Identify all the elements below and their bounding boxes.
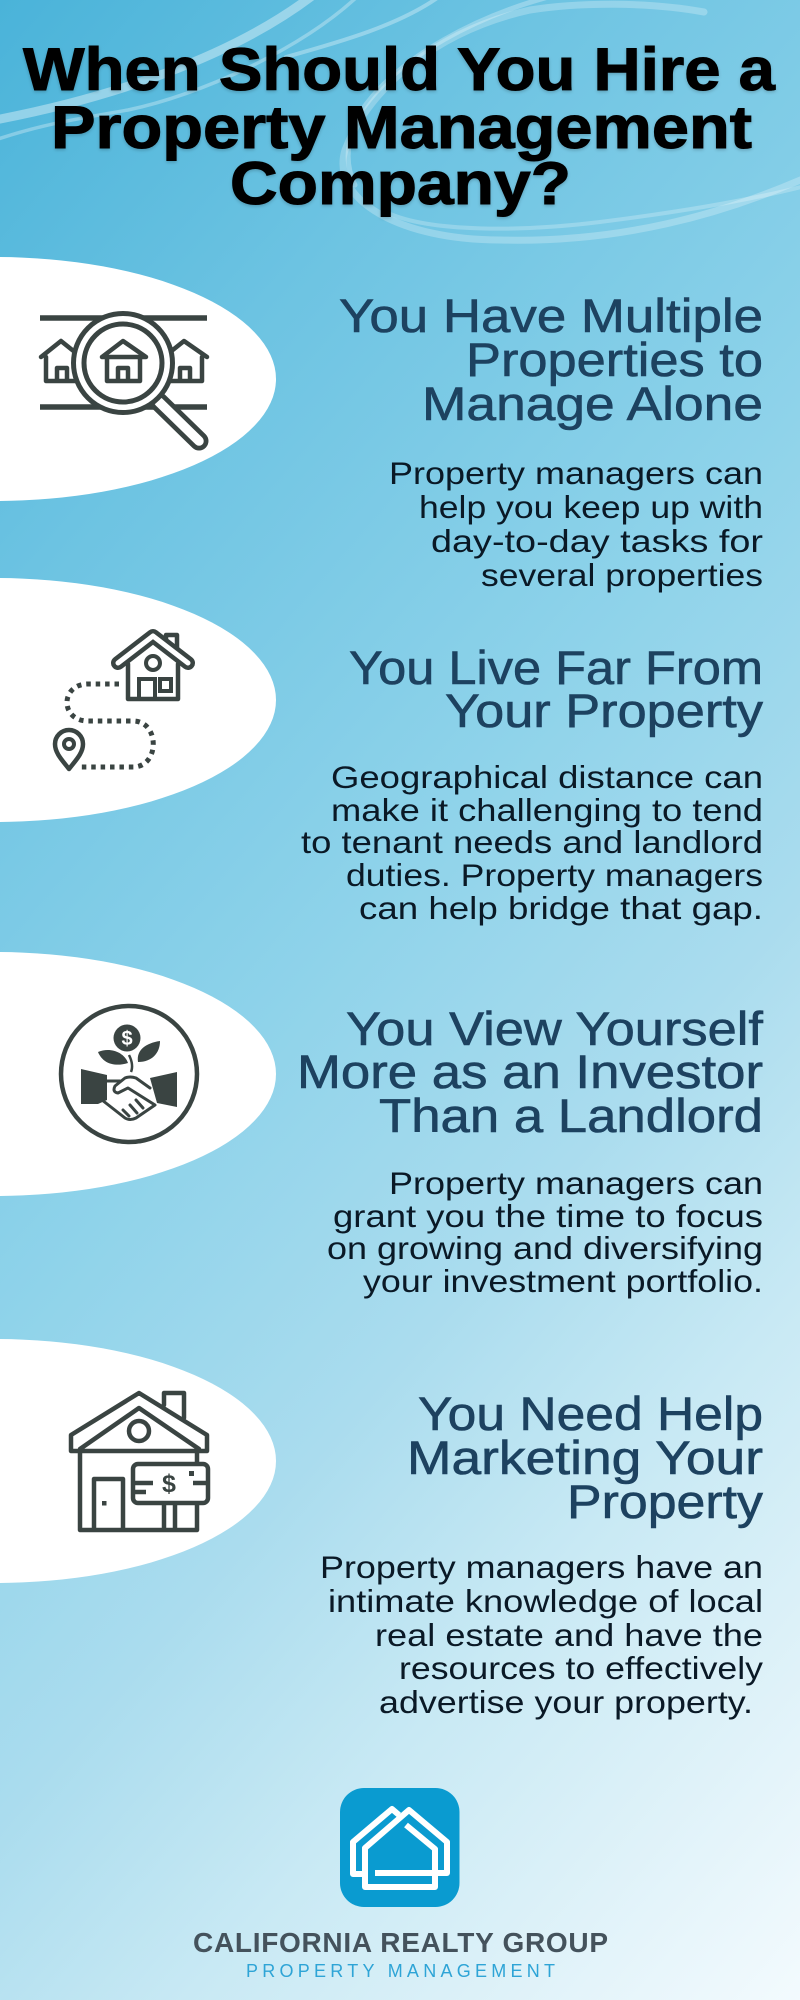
body text 1: several properties: [481, 557, 763, 593]
icon: house with price sign: $: [162, 1470, 176, 1498]
body text 3: [327, 1165, 763, 1299]
heading 1: Manage Alone: [422, 377, 763, 430]
body text 4: Property managers have an: [320, 1549, 763, 1585]
body text 4: [320, 1549, 763, 1720]
heading 3: More as an Investor: [297, 1045, 763, 1098]
body text 2: can help bridge that gap.: [359, 890, 763, 926]
heading 2: [349, 641, 764, 737]
panel: investor: [0, 952, 764, 1299]
company tagline: PROPERTY MANAGEMENT: [246, 1961, 555, 1981]
body text 1: Property managers can: [389, 455, 763, 491]
heading 4: Property: [567, 1475, 764, 1528]
title: [23, 36, 776, 217]
panel: live far away: [0, 578, 764, 926]
title: Company?: [230, 150, 571, 217]
body text 4: intimate knowledge of local: [328, 1583, 763, 1619]
body text 4: real estate and have the: [375, 1617, 763, 1653]
white ellipse 3: [0, 952, 276, 1196]
panel: multiple properties: [0, 257, 763, 593]
body text 3: on growing and diversifying: [327, 1230, 763, 1266]
heading 3: You View Yourself: [346, 1002, 764, 1055]
decorative swirl: [0, 0, 800, 240]
heading 3: Than a Landlord: [379, 1089, 763, 1142]
heading 2: You Live Far From: [349, 641, 763, 694]
icon: handshake and money plant: [61, 1006, 197, 1142]
body text 3: your investment portfolio.: [363, 1263, 763, 1299]
body text 1: [389, 455, 763, 593]
body text 3: Property managers can: [389, 1165, 763, 1201]
icon: house with price sign: [71, 1393, 210, 1530]
icon: magnifier over houses: [40, 314, 207, 441]
body text 4: resources to effectively: [399, 1650, 763, 1686]
heading 2: Your Property: [445, 684, 764, 737]
company logo: [193, 1788, 608, 1981]
company name: CALIFORNIA REALTY GROUP: [193, 1927, 608, 1958]
body text 2: to tenant needs and landlord: [301, 824, 763, 860]
heading 1: You Have Multiple: [339, 289, 763, 342]
icon: house and route to map pin: [55, 635, 188, 769]
icon: handshake and money plant: $: [121, 1028, 133, 1050]
white ellipse 1: [0, 257, 276, 501]
body text 3: grant you the time to focus: [333, 1198, 763, 1234]
body text 2: make it challenging to tend: [331, 792, 763, 828]
icon: logo house: [340, 1788, 460, 1907]
heading 4: [407, 1387, 764, 1528]
heading 3: [297, 1002, 764, 1142]
body text 2: duties. Property managers: [346, 857, 763, 893]
heading 1: [339, 289, 763, 430]
body text 1: help you keep up with: [419, 489, 763, 525]
body text 4: advertise your property.: [379, 1684, 753, 1720]
body text 2: Geographical distance can: [331, 759, 763, 795]
white ellipse 2: [0, 578, 276, 822]
heading 4: You Need Help: [418, 1387, 763, 1440]
title: When Should You Hire a: [23, 36, 776, 103]
white ellipse 4: [0, 1339, 276, 1583]
heading 4: Marketing Your: [407, 1431, 763, 1484]
body text 1: day-to-day tasks for: [431, 523, 763, 559]
title: Property Management: [51, 94, 752, 161]
panel: marketing: [0, 1339, 764, 1720]
body text 2: [301, 759, 763, 926]
heading 1: Properties to: [466, 333, 763, 386]
